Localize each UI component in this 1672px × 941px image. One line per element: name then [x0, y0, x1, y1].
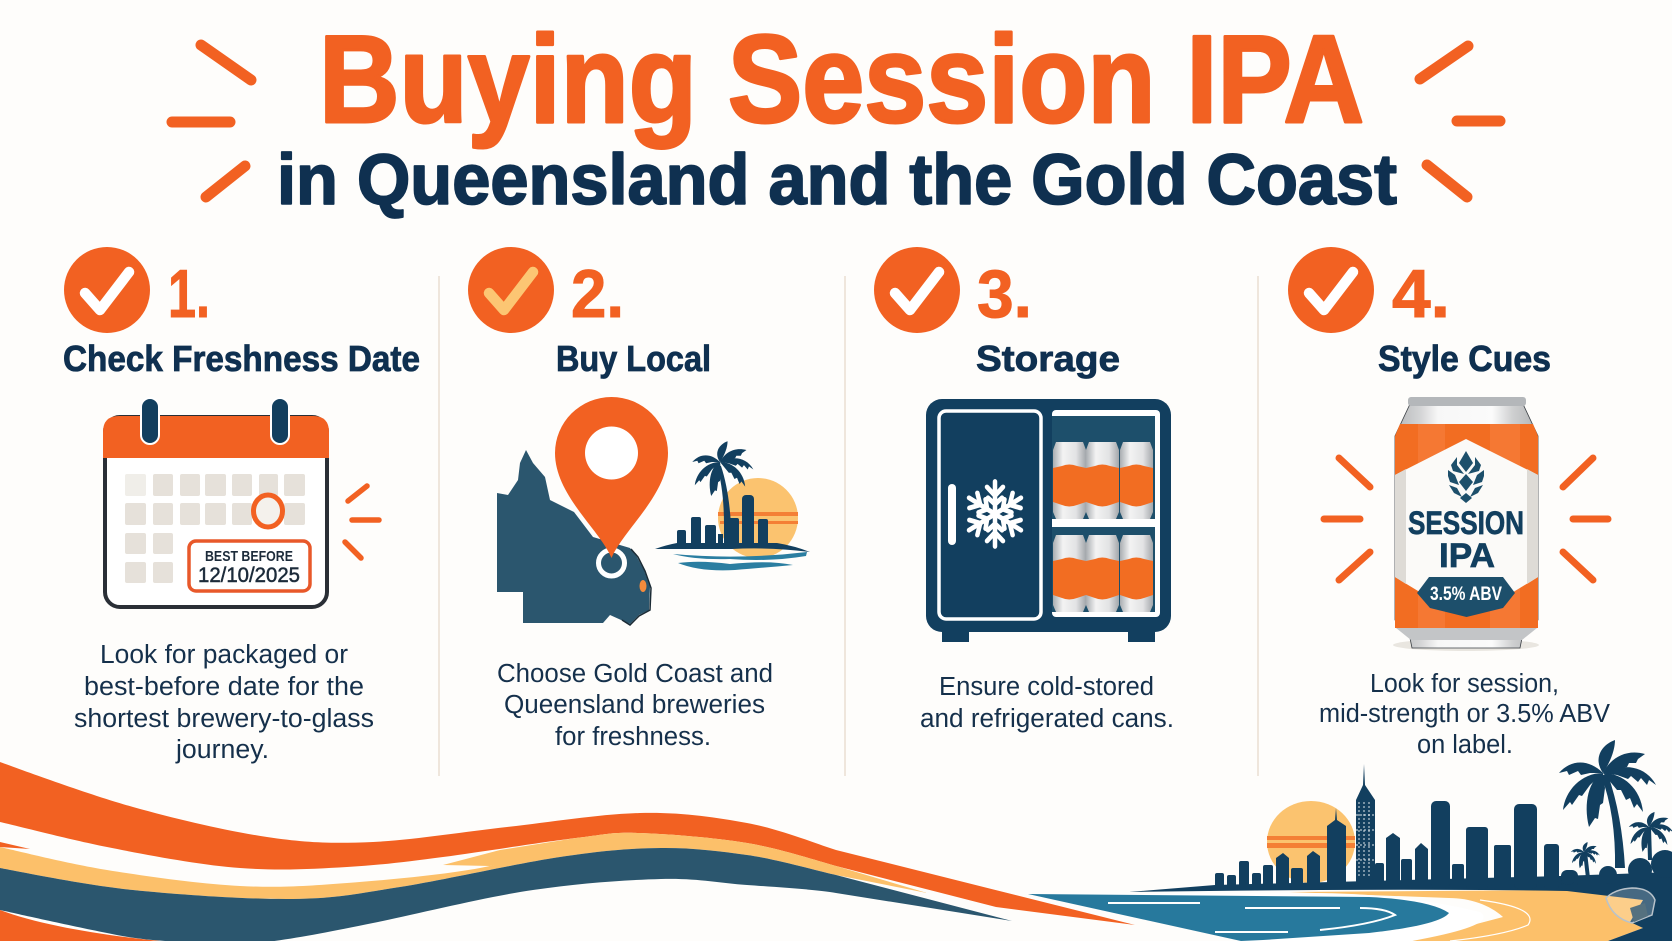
- icon: calendar: BEST BEFORE: [205, 548, 293, 565]
- palm trees: [1559, 740, 1672, 878]
- sun: [1267, 801, 1355, 883]
- beach: [1289, 890, 1643, 941]
- description text: journey.: [175, 736, 269, 764]
- icon: calendar: 12/10/2025: [198, 564, 300, 587]
- subheading: in Queensland and the Gold Coast: in Queensland and the Gold Coast: [277, 141, 1397, 220]
- check badge 2: [468, 247, 554, 333]
- panel: step 2 buy local: [468, 247, 810, 751]
- hop icon: [1448, 451, 1484, 503]
- description text: [497, 660, 773, 751]
- Gold Coast beach and skyline: [1028, 740, 1672, 941]
- skyline: [1129, 764, 1672, 941]
- icon: fridge with cans: [926, 399, 1171, 642]
- number 2: 2.: [571, 256, 624, 332]
- bottom waves: [0, 762, 1135, 941]
- description text: shortest brewery-to-glass: [74, 705, 374, 733]
- title: [172, 11, 1500, 220]
- icon: Session IPA can: IPA: [1439, 537, 1495, 575]
- description text: Ensure cold-stored: [939, 673, 1154, 701]
- check badge 4: [1288, 247, 1374, 333]
- description text: [74, 641, 374, 764]
- description text: Look for session,: [1370, 670, 1559, 698]
- description text: on label.: [1417, 731, 1513, 759]
- check badge 3: [874, 247, 960, 333]
- check badge 1: [64, 247, 150, 333]
- icon: Session IPA can: SESSION: [1408, 505, 1524, 541]
- description text: Choose Gold Coast and: [497, 660, 773, 688]
- panel: step 1 check freshness date: [63, 247, 420, 764]
- description text: Queensland breweries: [504, 691, 765, 719]
- number 4: 4.: [1392, 256, 1450, 332]
- heading: Storage: [976, 338, 1120, 379]
- water: [1028, 893, 1484, 941]
- description text: for freshness.: [555, 723, 711, 751]
- description text: [920, 673, 1174, 733]
- icon: calendar: [103, 398, 379, 607]
- title burst rays: [172, 45, 1500, 197]
- watermark shield: [1606, 888, 1655, 923]
- heading: Buy Local: [556, 338, 711, 379]
- heading: Style Cues: [1378, 338, 1551, 379]
- description text: best-before date for the: [84, 673, 364, 701]
- icon: palm, sunset and skyline: [655, 441, 810, 570]
- icon: Session IPA can: [1324, 397, 1608, 651]
- panel: step 3 storage: [874, 247, 1174, 733]
- heading: Check Freshness Date: [63, 338, 420, 379]
- panel: step 4 style cues: [1288, 247, 1610, 759]
- description text: mid-strength or 3.5% ABV: [1319, 700, 1610, 728]
- number 1: 1.: [168, 256, 210, 332]
- icon: Session IPA can: 3.5% ABV: [1430, 584, 1502, 605]
- description text: [1319, 670, 1610, 759]
- heading: Buying Session IPA: Buying Session IPA: [319, 11, 1364, 149]
- description text: Look for packaged or: [100, 641, 349, 669]
- number 3: 3.: [977, 256, 1032, 332]
- icon: Queensland map with pin: [497, 397, 668, 625]
- description text: and refrigerated cans.: [920, 705, 1174, 733]
